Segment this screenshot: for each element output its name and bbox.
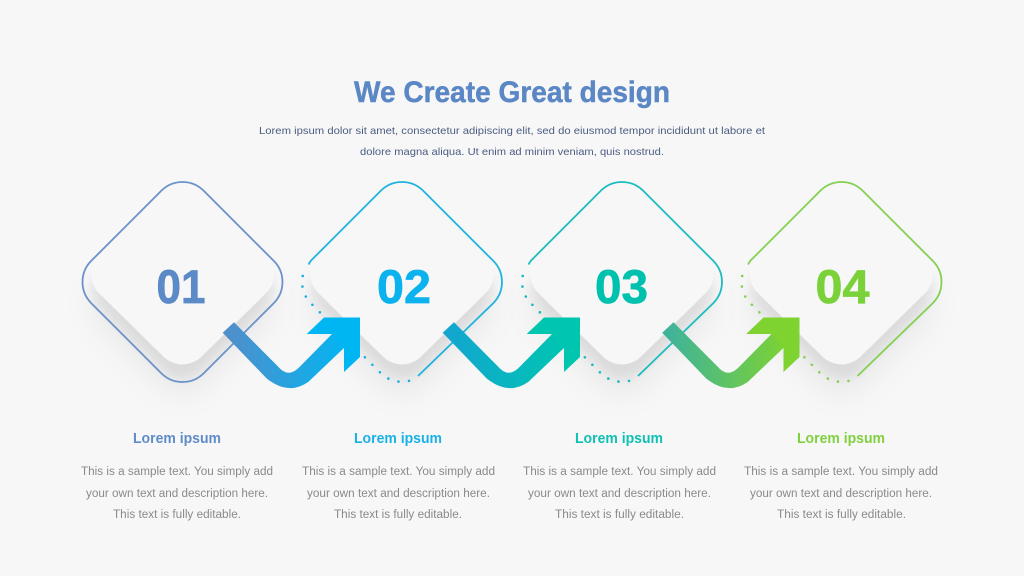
diamond 04 xyxy=(742,182,941,382)
title: We Create Great design xyxy=(354,76,670,109)
diamond 01: 01 xyxy=(156,260,206,313)
column 3 text: Lorem ipsum xyxy=(575,431,663,447)
column 1 text: your own text and description here. xyxy=(86,488,268,500)
column 1 text: This is a sample text. You simply add xyxy=(81,466,273,478)
column 4 text: This text is fully editable. xyxy=(777,509,906,521)
arrow 3 to 4 xyxy=(662,318,800,388)
column 4 text: Lorem ipsum xyxy=(797,431,885,447)
arrow 2 to 3 xyxy=(443,318,580,388)
column 1 text xyxy=(81,431,273,521)
diamond 01 xyxy=(83,182,282,382)
column 4 text: your own text and description here. xyxy=(750,488,932,500)
arrow 1 to 2 xyxy=(223,318,360,388)
column 2 text xyxy=(302,431,495,521)
column 4 text xyxy=(744,431,938,521)
column 3 text xyxy=(523,431,716,521)
column 2 text: This is a sample text. You simply add xyxy=(302,466,495,478)
diamond 03: 03 xyxy=(595,260,648,313)
column 1 text: This text is fully editable. xyxy=(113,509,241,521)
column 2 text: This text is fully editable. xyxy=(334,509,462,521)
intro text: dolore magna aliqua. Ut enim ad minim veniam, quis nostrud. xyxy=(360,146,664,158)
column 3 text: This text is fully editable. xyxy=(555,509,684,521)
column 3 text: your own text and description here. xyxy=(528,488,711,500)
column 3 text: This is a sample text. You simply add xyxy=(523,466,716,478)
column 1 text: Lorem ipsum xyxy=(133,431,221,447)
column 4 text: This is a sample text. You simply add xyxy=(744,466,938,478)
diamond 03 xyxy=(522,182,722,382)
diamond 04: 04 xyxy=(816,260,870,313)
diamond 02 xyxy=(302,182,502,382)
column 2 text: Lorem ipsum xyxy=(354,431,442,447)
diamond 02: 02 xyxy=(377,260,431,313)
intro text xyxy=(259,125,765,158)
column 2 text: your own text and description here. xyxy=(307,488,490,500)
intro text: Lorem ipsum dolor sit amet, consectetur adipiscing elit, sed do eiusmod tempor incididunt ut labore et xyxy=(259,125,765,137)
